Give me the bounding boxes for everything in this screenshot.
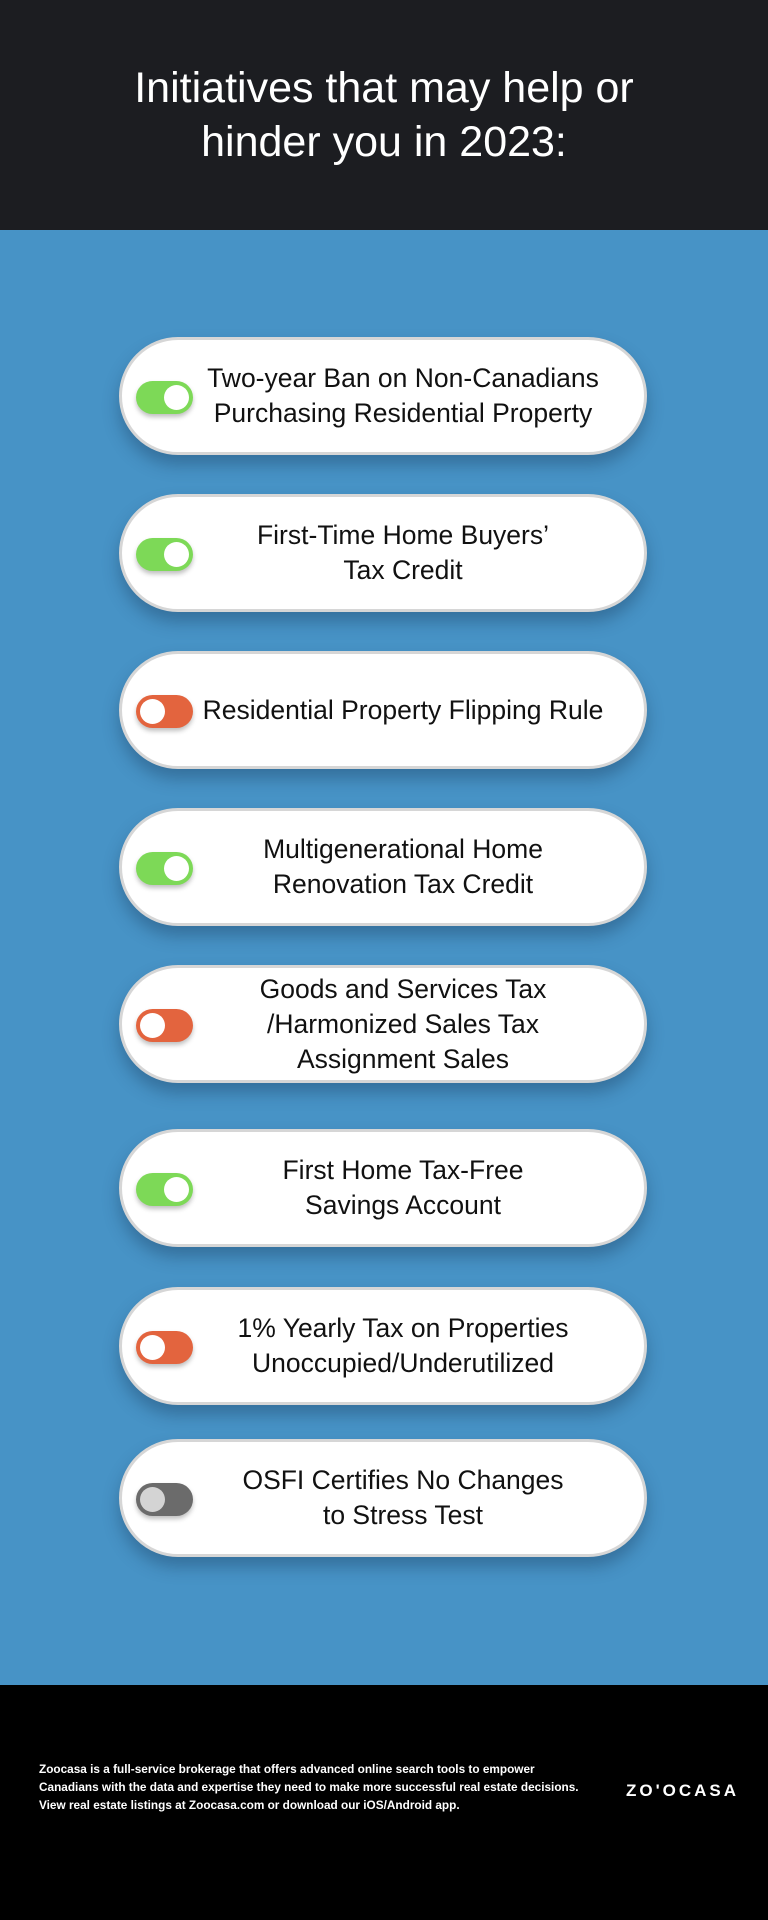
pill: two-year ban: Purchasing Residential Property <box>214 398 592 428</box>
pill: 1% tax: 1% Yearly Tax on Properties <box>238 1313 568 1343</box>
footer <box>0 1685 768 1920</box>
header band <box>0 0 768 230</box>
pill: flipping rule <box>119 651 647 769</box>
pill: GST/HST <box>119 965 647 1083</box>
title: Initiatives that may help or <box>134 64 634 112</box>
pill: first-time buyers tax credit: Tax Credit <box>343 555 463 585</box>
pill: FHSA: First Home Tax-Free <box>282 1155 524 1185</box>
pill: GST/HST: /Harmonized Sales Tax <box>267 1008 539 1038</box>
pill: 1% tax: Unoccupied/Underutilized <box>252 1348 554 1378</box>
pill: two-year ban: Two-year Ban on Non-Canadians <box>207 363 599 393</box>
pill: multigenerational: Multigenerational Home <box>263 834 543 864</box>
pill: FHSA <box>119 1129 647 1247</box>
logo: ZO'OCASA <box>626 1781 739 1800</box>
footer text: Canadians with the data and expertise they need to make more successful real estate decisions. <box>39 1780 579 1794</box>
pill: OSFI <box>119 1439 647 1557</box>
pill: multigenerational <box>119 808 647 926</box>
pill: GST/HST: Assignment Sales <box>297 1044 509 1074</box>
title <box>134 64 634 166</box>
pill: FHSA: Savings Account <box>305 1190 501 1220</box>
title: hinder you in 2023: <box>201 118 567 166</box>
pill: flipping rule: Residential Property Flipping Rule <box>203 694 603 724</box>
pill: two-year ban <box>119 337 647 455</box>
pill: 1% tax <box>119 1287 647 1405</box>
footer text <box>39 1762 579 1812</box>
pill: first-time buyers tax credit: First-Time Home Buyers’ <box>257 520 549 550</box>
footer text: Zoocasa is a full-service brokerage that offers advanced online search tools to empower <box>39 1762 535 1776</box>
pill: OSFI: OSFI Certifies No Changes <box>242 1465 564 1495</box>
pill: multigenerational: Renovation Tax Credit <box>273 869 533 899</box>
pill: first-time buyers tax credit <box>119 494 647 612</box>
pill: OSFI: to Stress Test <box>323 1500 483 1530</box>
pill: GST/HST: Goods and Services Tax <box>260 974 546 1004</box>
footer text: View real estate listings at Zoocasa.com or download our iOS/Android app. <box>39 1798 460 1812</box>
